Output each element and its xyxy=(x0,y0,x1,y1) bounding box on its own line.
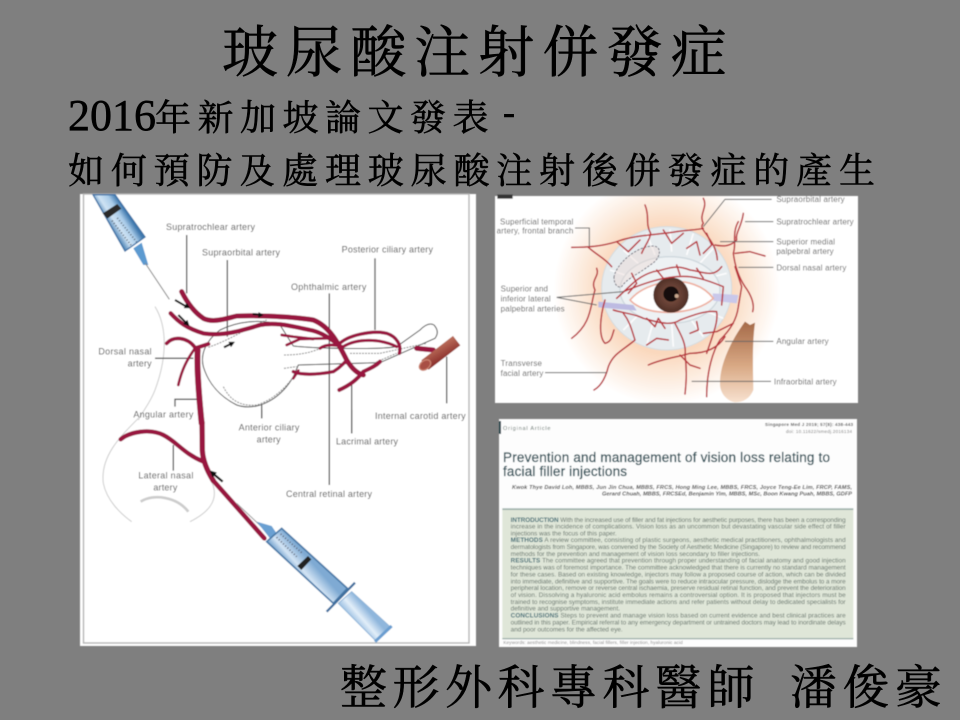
abstract box: INTRODUCTION With the increased use of filler and fat injections for aesthetic purposes, there has been a corresponding xyxy=(511,517,846,524)
panel: periorbital arteries illustration: Supraorbital artery xyxy=(776,195,845,204)
journal header: Original Article xyxy=(503,426,551,432)
panel: periorbital arteries illustration: Superior and xyxy=(501,284,548,293)
abstract box: RESULTS The committee agreed that prevention through proper understanding of facial anatomy and good injection xyxy=(511,558,846,565)
journal header xyxy=(499,421,853,434)
abstract box: peripheral location, remove or reverse central ischaemia, preserve residual retinal function, and prevent the deterioration xyxy=(511,585,846,592)
abstract box: CONCLUSIONS Steps to prevent and manage vision loss based on current evidence and best clinical practices are xyxy=(511,613,846,620)
panel: ophthalmic artery anatomy diagram: Internal carotid artery xyxy=(375,411,466,421)
abstract box: of vision. Dissolving a hyaluronic acid embolus remains a controversial option. It is proposed that injectors must be xyxy=(511,592,846,599)
authors xyxy=(512,485,852,498)
panel: periorbital arteries illustration: palpebral arteries xyxy=(501,304,565,313)
panel: ophthalmic artery anatomy diagram: artery xyxy=(153,482,178,492)
abstract box: METHODS A review committee, consisting of plastic surgeons, aesthetic medical practitioners, ophthalmologists and xyxy=(511,537,846,544)
panel: ophthalmic artery anatomy diagram: Ophthalmic artery xyxy=(291,282,367,292)
subtitle line 1: 年新加坡論文發表 xyxy=(155,98,495,138)
abstract box: increase in the incidence of complications. Vision loss as an uncommon but devastating vascular side effect of filler xyxy=(511,524,846,531)
abstract box: trained to recognise symptoms, institute immediate actions and refer patients without delay to dedicated specialists for xyxy=(511,599,846,606)
nose shading xyxy=(720,322,755,402)
orbit ring xyxy=(602,227,732,350)
keywords: Keywords: aesthetic medicine, blindness, facial fillers, filler injection, hyaluronic acid xyxy=(503,640,683,645)
arteries xyxy=(572,198,765,397)
panel: periorbital arteries illustration: artery, frontal branch xyxy=(497,227,573,236)
panel: periorbital arteries illustration: Superior medial xyxy=(776,238,835,247)
vessels xyxy=(167,292,433,423)
article title: Prevention and management of vision loss relating to xyxy=(503,450,830,465)
abstract box: outlined in this paper. Empirical referral to any emergency department or untrained doctors may lead to inordinate delays xyxy=(511,620,846,627)
panel: periorbital arteries illustration: Transverse xyxy=(501,359,543,368)
panel: periorbital arteries illustration: Infraorbital artery xyxy=(774,377,837,386)
panel: ophthalmic artery anatomy diagram: artery xyxy=(128,358,152,368)
author credit: 潘俊豪 xyxy=(790,663,948,715)
panel: ophthalmic artery anatomy diagram: artery xyxy=(257,434,281,444)
panel: ophthalmic artery anatomy diagram: Central retinal artery xyxy=(286,489,372,499)
journal header: doi: 10.11622/smedj.2016134 xyxy=(786,429,852,434)
journal header: Singapore Med J 2019; 57(8): 438-443 xyxy=(765,422,853,427)
angular and lateral nasal vessels xyxy=(121,422,264,538)
abstract box: dermatologists from Singapore, was convened by the Society of Aesthetic Medicine (Singapore) to review and recommend xyxy=(511,544,846,551)
abstract box: techniques was of foremost importance. The committee acknowledged that there is currently no standard management xyxy=(511,564,846,571)
abstract box: methods for the prevention and management of vision loss secondary to filler injections. xyxy=(511,551,760,558)
flow arrows xyxy=(175,300,263,347)
panel: periorbital arteries illustration: Dorsal nasal artery xyxy=(776,263,846,272)
leader lines lower xyxy=(173,410,352,471)
panel: periorbital arteries illustration: facial artery xyxy=(501,369,543,378)
authors: Kwok Thye David Loh, MBBS, Jun Jin Chua, MBBS, FRCS, Hong Ming Lee, MBBS, FRCS, Joyce Teng-Ee Lim, FRCP, FAMS, xyxy=(512,485,852,491)
panel: periorbital arteries illustration: Angular artery xyxy=(776,337,829,346)
authors: Gerard Chuah, MBBS, FRCSEd, Benjamin Yim, MBBS, MSc, Boon Kwang Puah, MBBS, GDFP xyxy=(602,492,852,498)
dashed gland outline xyxy=(614,246,659,287)
panel: journal article abstract xyxy=(499,419,857,647)
abstract box: definitive and supportive management. xyxy=(511,606,620,613)
panel: ophthalmic artery anatomy diagram: Angular artery xyxy=(133,409,194,419)
labels upper: Supratrochlear artery xyxy=(166,222,255,232)
abstract box: and poor outcomes for the affected eye. xyxy=(511,626,623,633)
leader lines xyxy=(155,235,447,485)
labels: Superficial temporal xyxy=(500,218,574,227)
nose outline lower xyxy=(103,418,214,522)
skin glow xyxy=(560,196,774,398)
lower syringe xyxy=(237,503,392,642)
subtitle line 2: 如何預防及處理玻尿酸注射後併發症的產生 xyxy=(68,151,882,191)
panel: periorbital arteries illustration: Supratrochlear artery xyxy=(776,218,854,227)
leader lines xyxy=(545,199,773,381)
eye xyxy=(630,277,713,313)
panel: ophthalmic artery anatomy diagram: Dorsal nasal xyxy=(98,346,152,356)
panel: ophthalmic artery anatomy diagram: Lacrimal artery xyxy=(336,436,398,446)
upper syringe xyxy=(93,195,169,299)
ring streaks xyxy=(605,229,729,347)
title: 玻尿酸注射併發症 xyxy=(222,23,735,85)
labels lower: Anterior ciliary xyxy=(239,422,300,432)
subtitle line 1: 2016 xyxy=(68,91,156,140)
eyeball outline xyxy=(202,321,437,407)
panel: periorbital arteries illustration xyxy=(495,175,858,405)
panel: periorbital arteries illustration: palpebral artery xyxy=(776,247,834,256)
dashed vessels xyxy=(208,320,427,405)
abstract box: injections was the focus of this paper. xyxy=(511,531,617,538)
subtitle line 1: - xyxy=(503,92,522,132)
abstract box: for these cases. Based on existing knowledge, injectors may follow a proposed course of action, which can be divided xyxy=(511,571,846,578)
nose outline upper xyxy=(138,307,164,420)
abstract box xyxy=(502,508,853,645)
panel: ophthalmic artery anatomy diagram: Supraorbital artery xyxy=(202,247,280,257)
panel: ophthalmic artery anatomy diagram xyxy=(80,194,476,646)
article title: facial filler injections xyxy=(503,464,627,479)
inner lid fold xyxy=(620,257,720,323)
abstract box: into immediate, definitive and supportive. The goals were to reduce intraocular pressure, dislodge the embolus to a more xyxy=(511,578,846,585)
author credit: 整形外科專科醫師 xyxy=(340,663,760,715)
corner figure tag xyxy=(497,195,513,199)
arrow near needle xyxy=(210,471,223,482)
panel: periorbital arteries illustration: inferior lateral xyxy=(501,294,551,303)
panel: ophthalmic artery anatomy diagram: Lateral nasal xyxy=(138,470,193,480)
internal carotid artery tube xyxy=(417,341,457,372)
article title xyxy=(503,450,830,479)
panel: ophthalmic artery anatomy diagram: Posterior ciliary artery xyxy=(342,245,433,255)
lilac tendons xyxy=(598,302,637,311)
